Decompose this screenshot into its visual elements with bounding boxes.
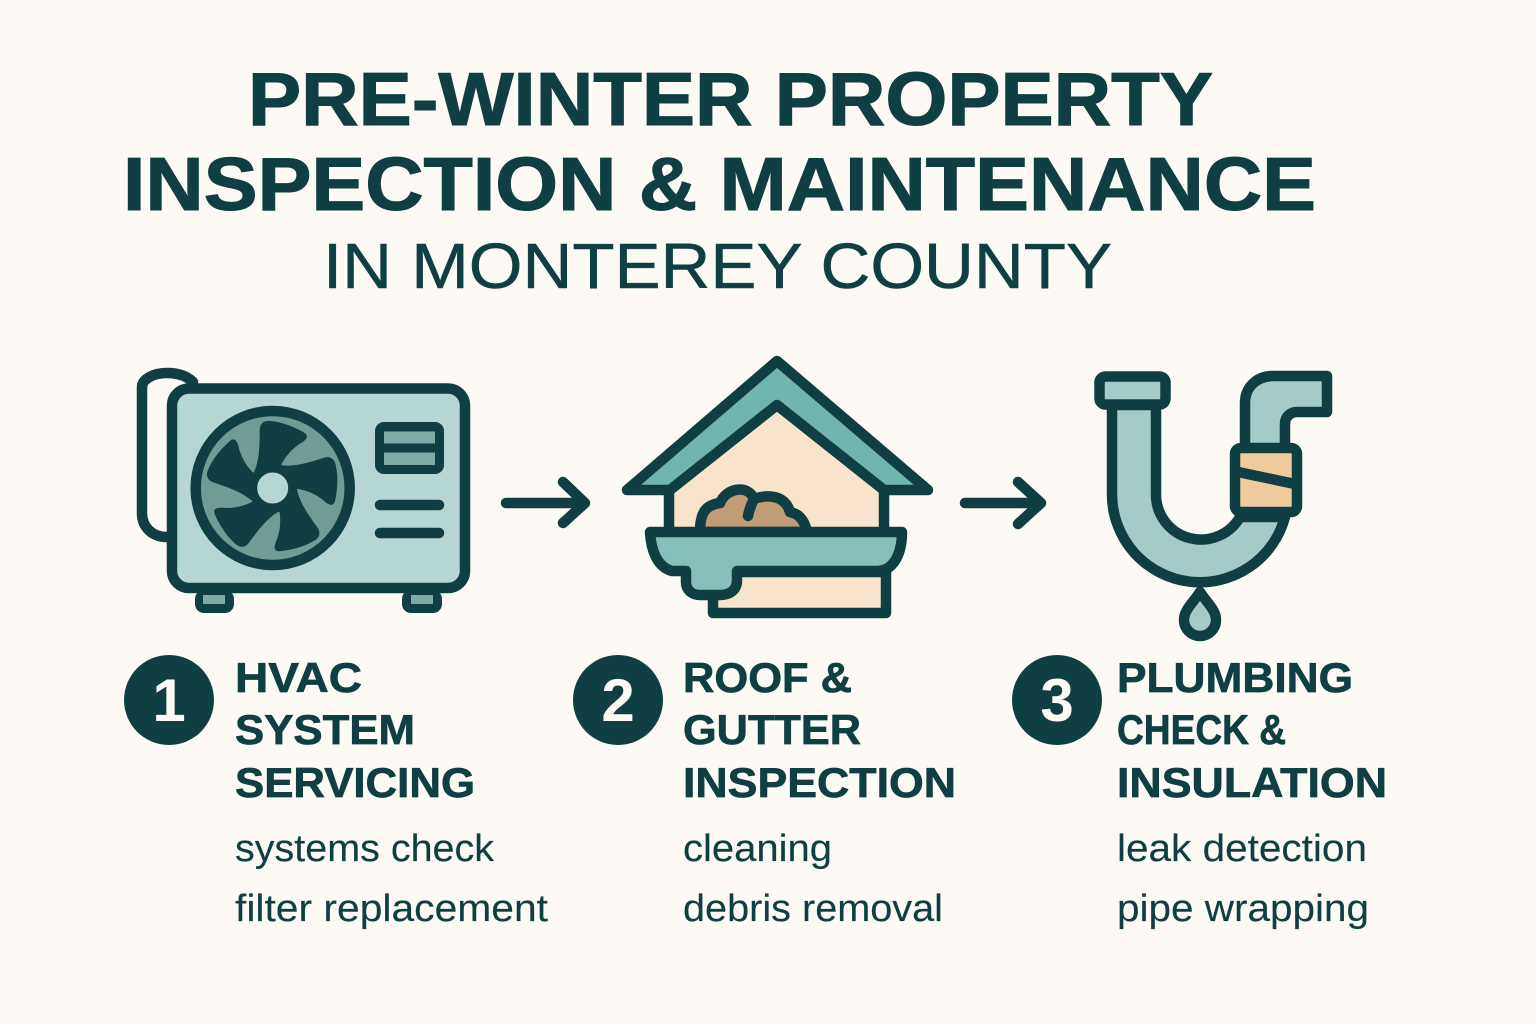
icon: leaking pipe (1100, 376, 1327, 636)
icon: HVAC outdoor unit (142, 373, 465, 613)
step 2 details: debris removal (683, 888, 943, 930)
step 3 heading (1117, 654, 1387, 806)
feet (195, 590, 442, 613)
step 2 heading: INSPECTION (683, 759, 956, 806)
step 2 number badge (573, 655, 663, 745)
arrow: step 1 to step 2 (506, 482, 585, 523)
panel: step 2 roof and gutter (573, 361, 956, 930)
step 1 heading: HVAC (235, 654, 362, 701)
vent lines (380, 505, 439, 533)
step 2 details (683, 828, 943, 930)
step 2 heading (683, 654, 956, 806)
step 2 heading: GUTTER (683, 706, 861, 753)
step 1 heading: SYSTEM (235, 706, 415, 753)
pipe cap (1100, 376, 1166, 404)
step 3 heading: INSULATION (1117, 759, 1387, 806)
step 3 details: pipe wrapping (1117, 888, 1369, 930)
panel: step 3 plumbing (1012, 376, 1387, 930)
step 1 number badge: 1 (152, 667, 186, 734)
step 1 details: filter replacement (235, 888, 548, 930)
control panel (375, 422, 444, 474)
step 3 details: leak detection (1117, 828, 1367, 870)
arrow: step 2 to step 3 (965, 482, 1041, 524)
subtitle line: IN MONTEREY COUNTY (323, 230, 1112, 302)
lower wall (713, 572, 886, 613)
step 3 heading: CHECK & (1117, 706, 1286, 753)
U pipe (1112, 405, 1285, 582)
step 3 number badge: 3 (1040, 667, 1074, 734)
step 1 heading: SERVICING (235, 759, 475, 806)
pipe wrap (1235, 448, 1297, 512)
step 2 heading: ROOF & (683, 654, 852, 701)
step 1 number badge (124, 655, 214, 745)
fan (196, 411, 350, 565)
icon: house with gutter (627, 361, 928, 613)
panel: step 1 HVAC (124, 373, 548, 930)
step 3 number badge (1012, 655, 1102, 745)
title line 2: INSPECTION & MAINTENANCE (123, 142, 1316, 226)
roof (627, 361, 928, 490)
step 2 details: cleaning (683, 828, 832, 870)
title line 1: PRE-WINTER PROPERTY (248, 57, 1213, 141)
step 3 heading: PLUMBING (1117, 654, 1353, 701)
step 3 details (1117, 828, 1369, 930)
title (123, 57, 1316, 302)
upper wall (669, 405, 884, 535)
step 2 number badge: 2 (601, 667, 635, 734)
step 1 heading (235, 654, 475, 806)
water drop (1184, 592, 1216, 636)
step 1 details (235, 828, 548, 930)
upper elbow (1245, 376, 1327, 450)
step 1 details: systems check (235, 828, 495, 870)
gutter (650, 532, 902, 595)
debris (700, 490, 807, 532)
